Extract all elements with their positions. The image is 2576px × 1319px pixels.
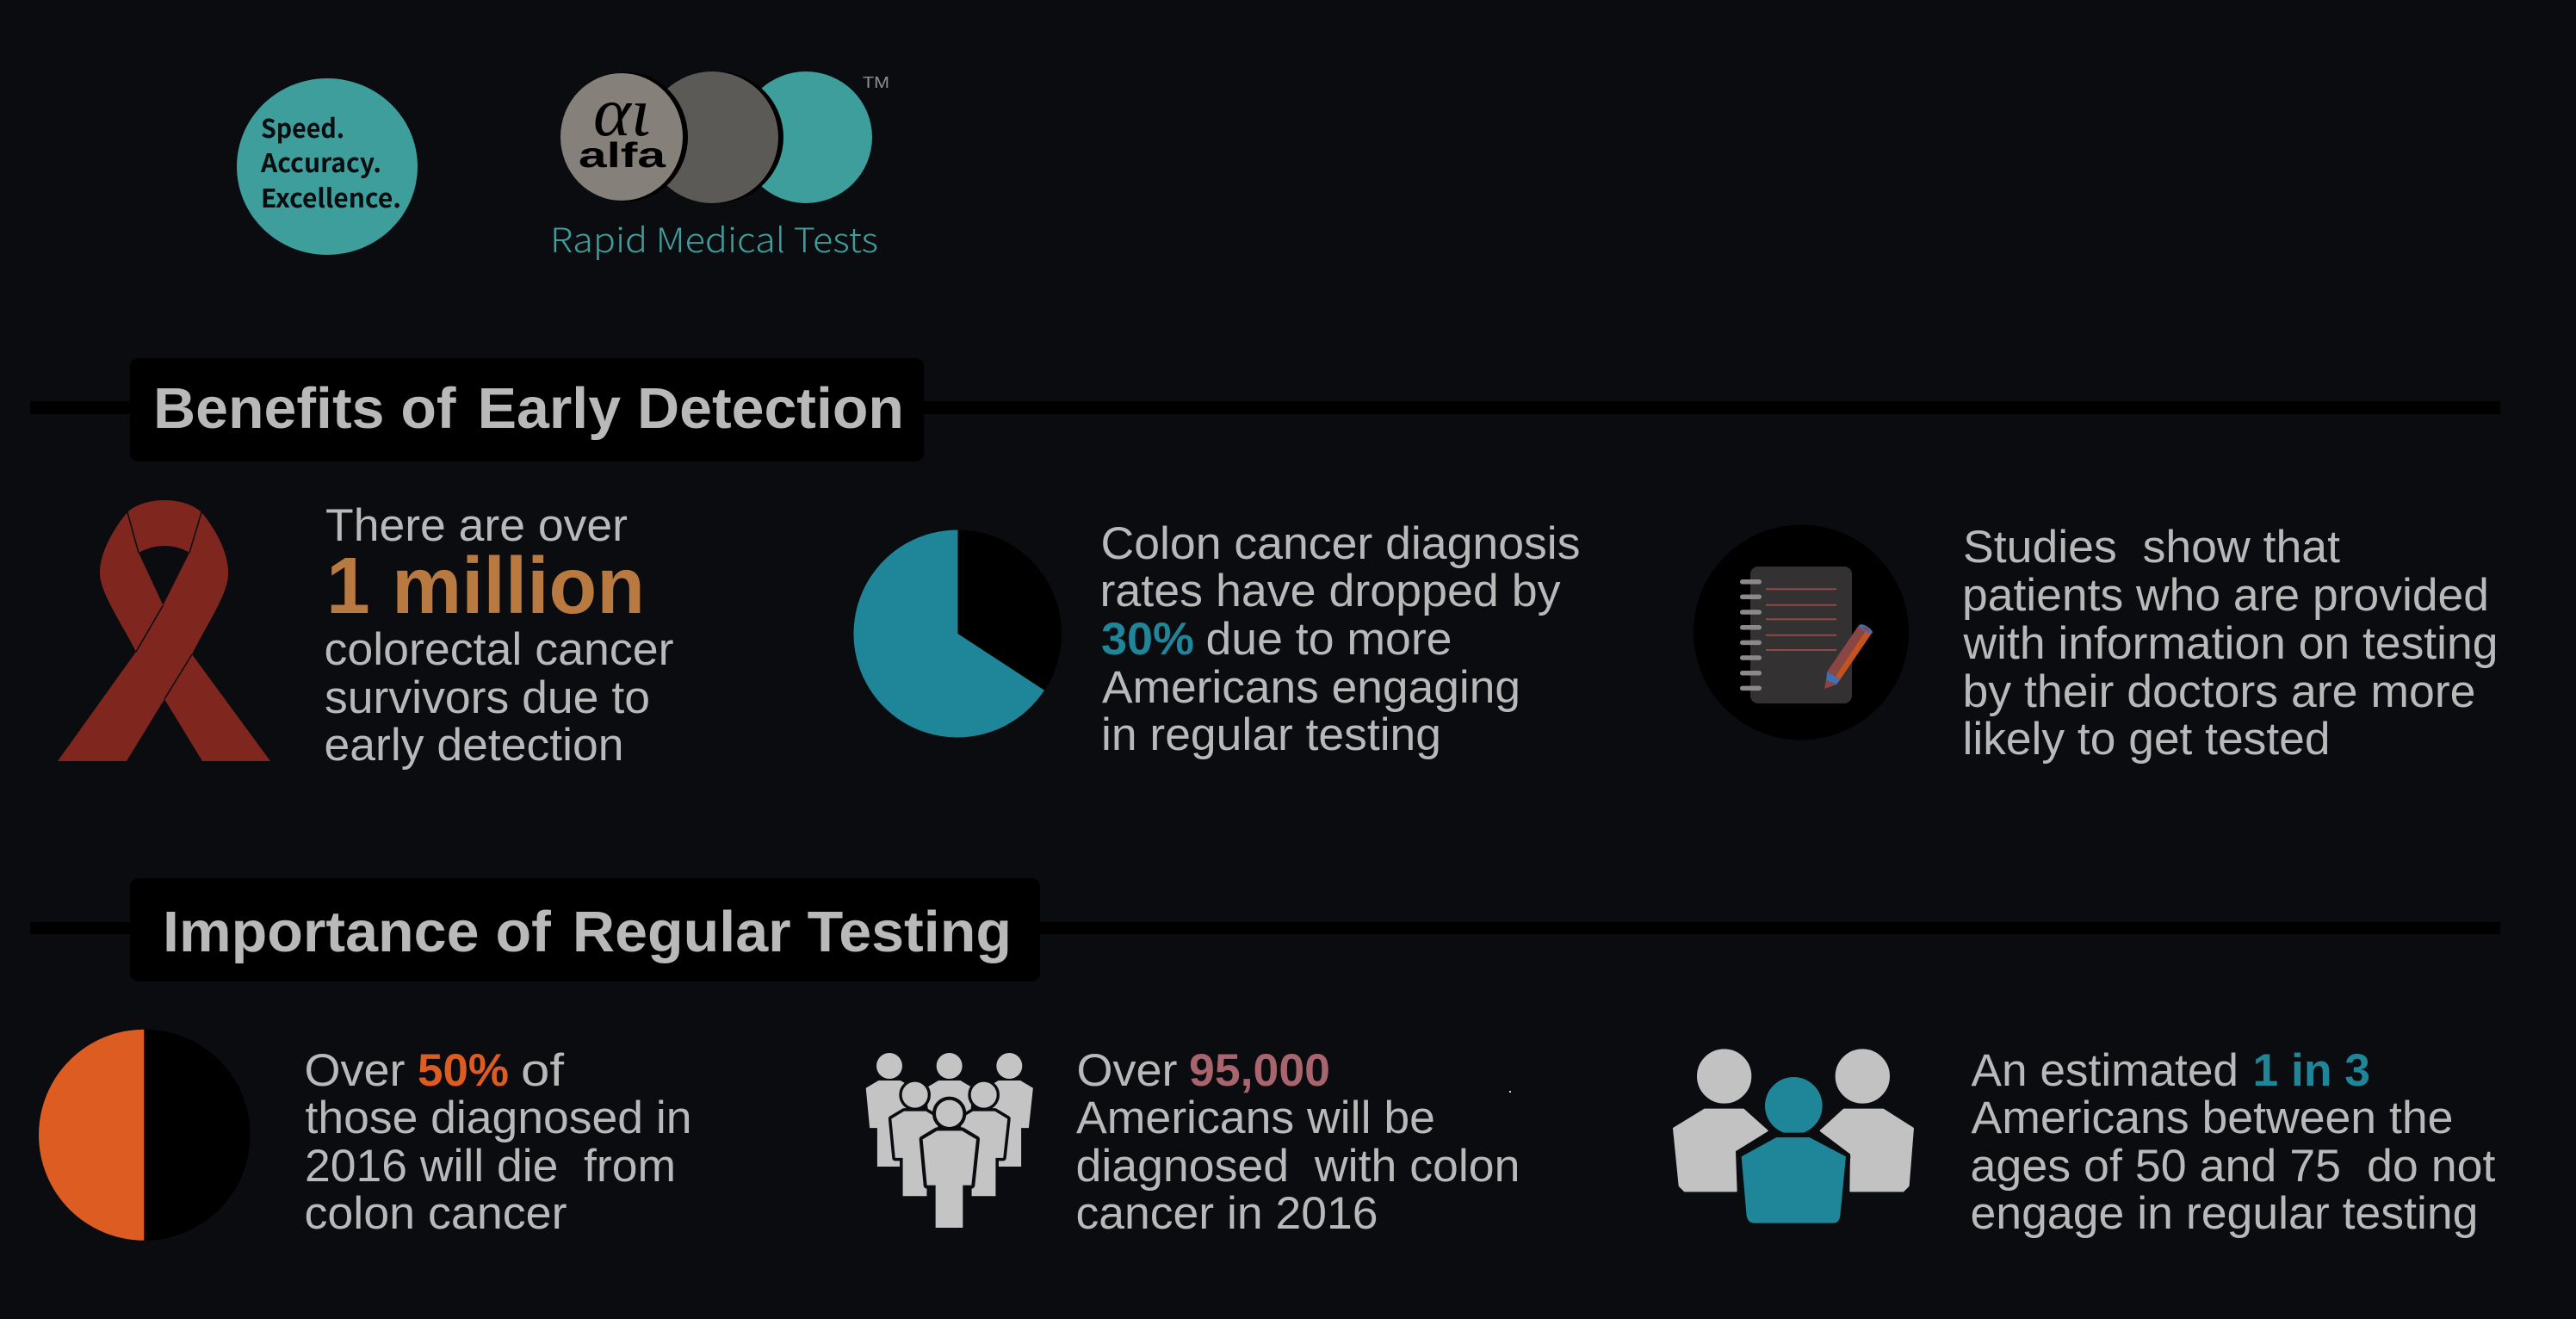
text: over 50% will die: colon cancer xyxy=(305,1188,567,1239)
text: diagnosis rates dropped: due to more xyxy=(1205,614,1452,665)
text: 1 million survivors xyxy=(324,500,673,771)
pie chart: 50% half xyxy=(39,1030,251,1241)
text: over 50% will die xyxy=(305,1045,692,1239)
text: studies on patient information: by their doctors are more xyxy=(1963,666,2476,717)
text: diagnosis rates dropped: Americans engaging xyxy=(1102,662,1520,713)
tagline badge xyxy=(237,78,418,255)
text: diagnosis rates dropped xyxy=(1100,518,1581,760)
text: over 95,000 diagnosed: diagnosed with colon xyxy=(1076,1141,1520,1192)
highlight: 50%: 50% xyxy=(418,1045,509,1096)
text: over 95,000 diagnosed xyxy=(1076,1045,1520,1239)
text: over 50% will die: those diagnosed in xyxy=(305,1093,692,1143)
section header: Benefits of Early Detection xyxy=(30,358,2500,461)
text: 1 in 3 do not test xyxy=(1970,1045,2496,1239)
text: diagnosis rates dropped: Colon cancer diagnosis xyxy=(1100,518,1581,569)
logo alpha mark: αι xyxy=(593,75,651,151)
text: over 95,000 diagnosed: Americans will be xyxy=(1076,1093,1435,1143)
text: 1 million survivors: survivors due to xyxy=(325,672,650,723)
icon: notebook and pencil xyxy=(1694,525,1909,740)
logo wordmark: alfa xyxy=(579,135,667,175)
text: 1 in 3 do not test: Americans between the xyxy=(1972,1093,2454,1143)
tagline text: Speed. xyxy=(261,108,344,146)
logo: Alfa Rapid Medical Tests xyxy=(550,71,889,263)
tagline text: Excellence. xyxy=(261,177,401,215)
text: over 95,000 diagnosed: Over xyxy=(1076,1045,1178,1096)
text: 1 in 3 do not test: An estimated xyxy=(1972,1045,2239,1096)
text: studies on patient information xyxy=(1962,522,2499,765)
section header: Importance of Regular Testing xyxy=(30,878,2500,982)
logo caption: Rapid Medical Tests xyxy=(550,214,878,263)
highlight: 1 million: 1 million xyxy=(326,541,645,630)
pie chart: 30% drop xyxy=(853,529,1062,737)
icon: three people, one highlighted xyxy=(1674,1050,1913,1223)
icon: awareness ribbon xyxy=(58,500,270,761)
text: studies on patient information: Studies show that xyxy=(1963,522,2340,573)
stray speck xyxy=(1509,1091,1511,1093)
highlight: 95,000: 95,000 xyxy=(1189,1045,1330,1096)
text: over 50% will die: 2016 will die from xyxy=(305,1141,676,1192)
text: over 95,000 diagnosed: cancer in 2016 xyxy=(1076,1188,1378,1239)
section header: Importance of Regular Testing: Importance of Regular Testing xyxy=(163,900,1012,964)
text: diagnosis rates dropped: in regular testing xyxy=(1101,709,1441,760)
icon: crowd of six people xyxy=(866,1053,1033,1228)
text: 1 million survivors: early detection xyxy=(324,720,623,771)
text: 1 million survivors: There are over xyxy=(325,500,628,551)
text: diagnosis rates dropped: rates have dropped by xyxy=(1100,566,1561,616)
text: studies on patient information: patients who are provided xyxy=(1962,570,2489,621)
tagline text: Accuracy. xyxy=(260,142,381,180)
text: 1 in 3 do not test: engage in regular testing xyxy=(1970,1188,2478,1239)
text: 1 in 3 do not test: ages of 50 and 75 do not xyxy=(1970,1141,2496,1192)
text: over 50% will die: of xyxy=(521,1045,564,1096)
section header: Benefits of Early Detection: Benefits of Early Detection xyxy=(153,376,904,441)
text: studies on patient information: with information on testing xyxy=(1962,618,2499,669)
tagline text xyxy=(260,108,401,215)
text: studies on patient information: likely to get tested xyxy=(1963,714,2330,765)
highlight: 30%: 30% xyxy=(1101,614,1194,665)
text: over 50% will die: Over xyxy=(305,1045,405,1096)
text: 1 million survivors: colorectal cancer xyxy=(324,624,673,675)
trademark: TM xyxy=(863,74,889,91)
highlight: 1 in 3: 1 in 3 xyxy=(2252,1045,2370,1096)
